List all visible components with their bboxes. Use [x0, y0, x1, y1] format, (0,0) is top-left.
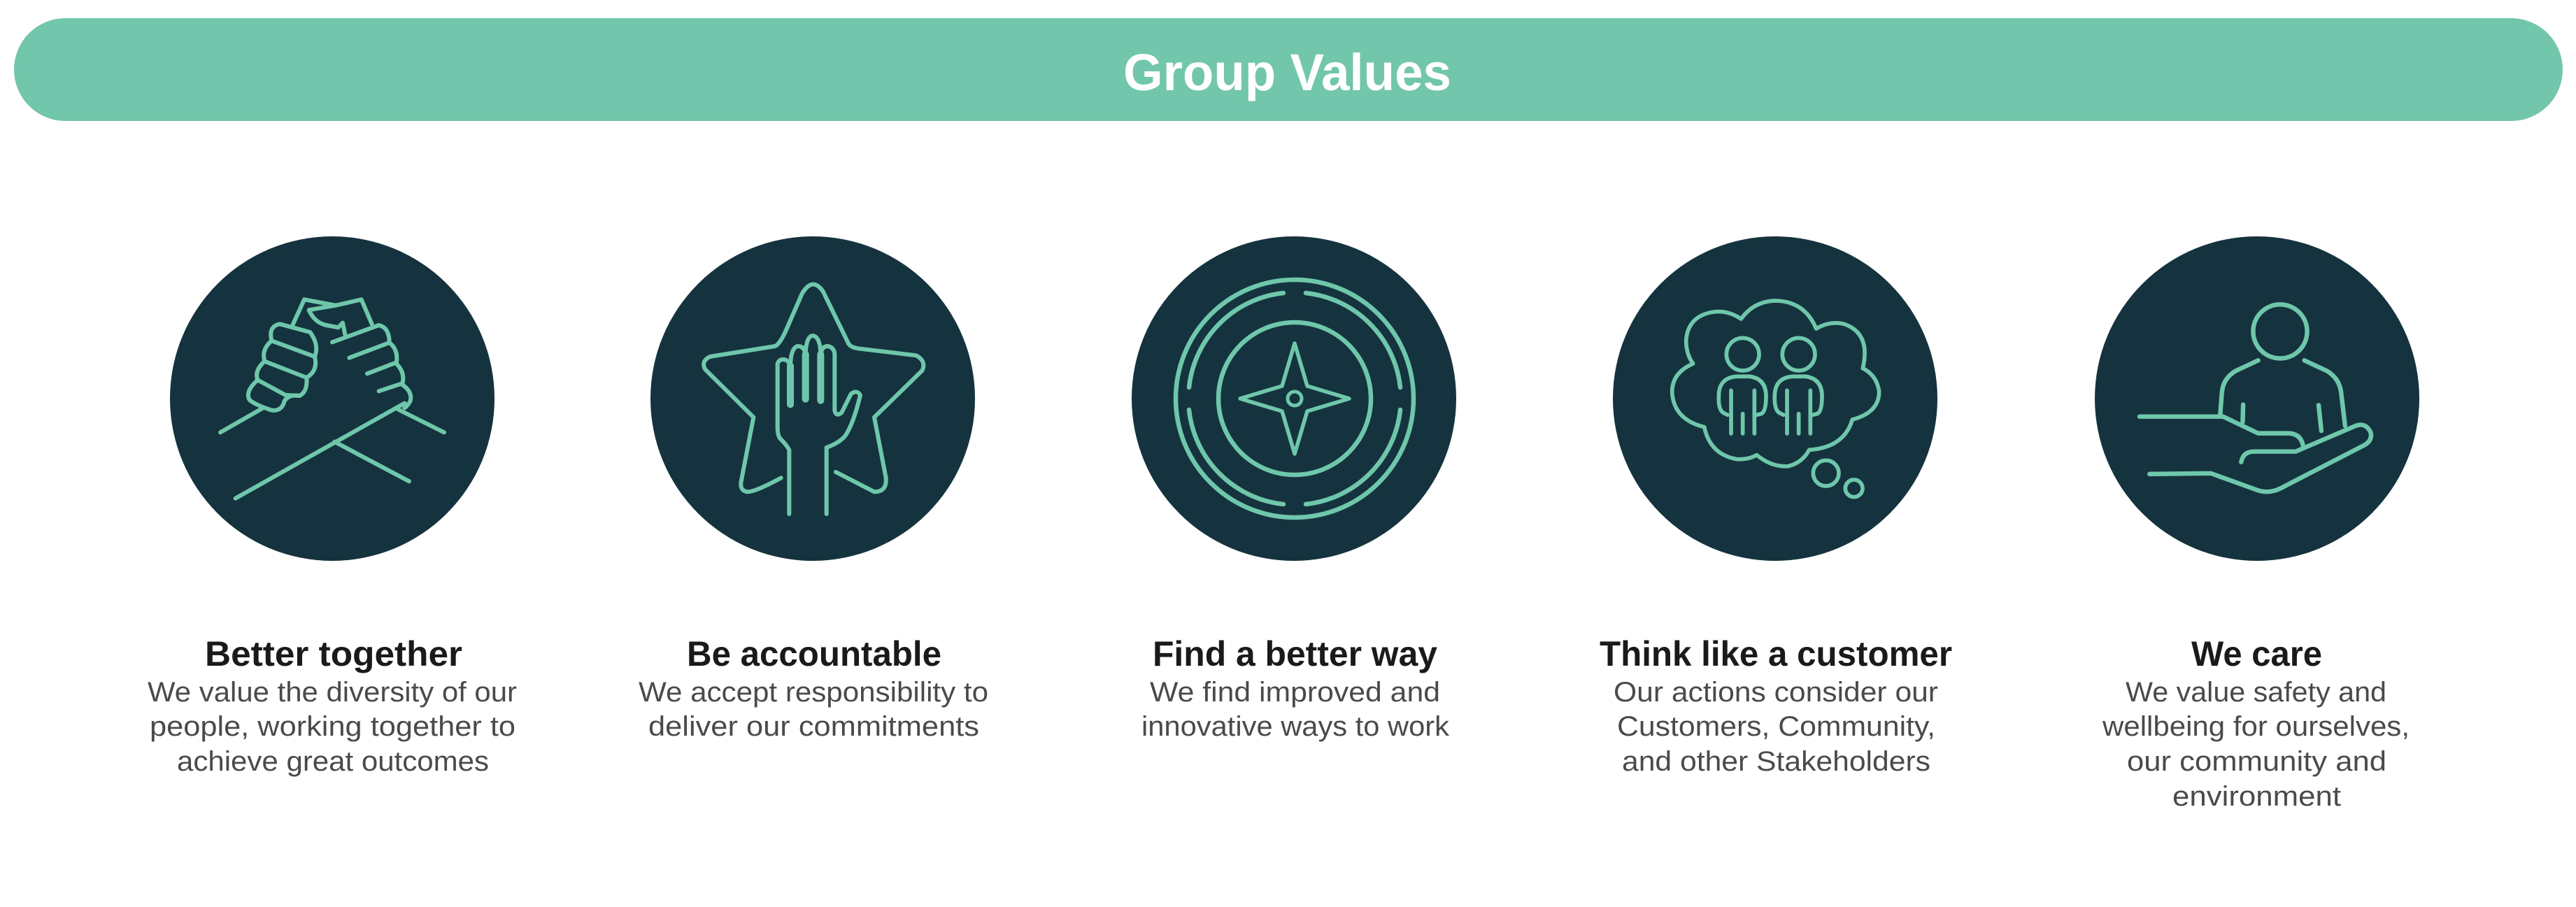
description: think like a customer	[1614, 677, 1938, 777]
description: be accountable: We accept responsibility to	[639, 677, 988, 708]
description: better together: achieve great outcomes	[177, 746, 489, 777]
panel: be accountable	[639, 236, 988, 742]
description: better together: We value the diversity of our	[148, 677, 517, 708]
description: be accountable	[639, 677, 988, 742]
title banner	[14, 18, 2563, 121]
description: we care: wellbeing for ourselves,	[2102, 711, 2410, 742]
heading: find a better way: Find a better way	[1153, 634, 1437, 673]
panel: better together	[148, 236, 517, 777]
icon: person in open hand	[2095, 236, 2419, 561]
heading: we care: We care	[2191, 634, 2322, 673]
icon: compass	[1132, 236, 1456, 561]
description: better together	[148, 677, 517, 777]
description: think like a customer: and other Stakeholders	[1622, 746, 1930, 777]
heading: be accountable: Be accountable	[687, 634, 941, 673]
description: better together: people, working together to	[150, 711, 515, 742]
panel: find a better way	[1132, 236, 1456, 742]
panel: think like a customer	[1600, 236, 1952, 777]
description: find a better way: innovative ways to work	[1141, 711, 1450, 742]
icon: thought cloud with people	[1613, 236, 1937, 561]
description: think like a customer: Our actions consider our	[1614, 677, 1938, 708]
heading: better together: Better together	[205, 634, 462, 673]
heading: think like a customer: Think like a customer	[1600, 634, 1952, 673]
description: we care	[2102, 677, 2410, 812]
icon: clasped hands	[170, 236, 494, 561]
description: find a better way: We find improved and	[1150, 677, 1440, 708]
description: find a better way	[1141, 677, 1450, 742]
description: we care: environment	[2172, 781, 2341, 812]
panel: we care	[2095, 236, 2419, 812]
description: we care: our community and	[2127, 746, 2386, 777]
description: think like a customer: Customers, Community,	[1617, 711, 1935, 742]
icon: hand on star	[650, 236, 975, 561]
description: we care: We value safety and	[2126, 677, 2386, 708]
description: be accountable: deliver our commitments	[648, 711, 979, 742]
title text: Group Values	[1123, 43, 1451, 101]
